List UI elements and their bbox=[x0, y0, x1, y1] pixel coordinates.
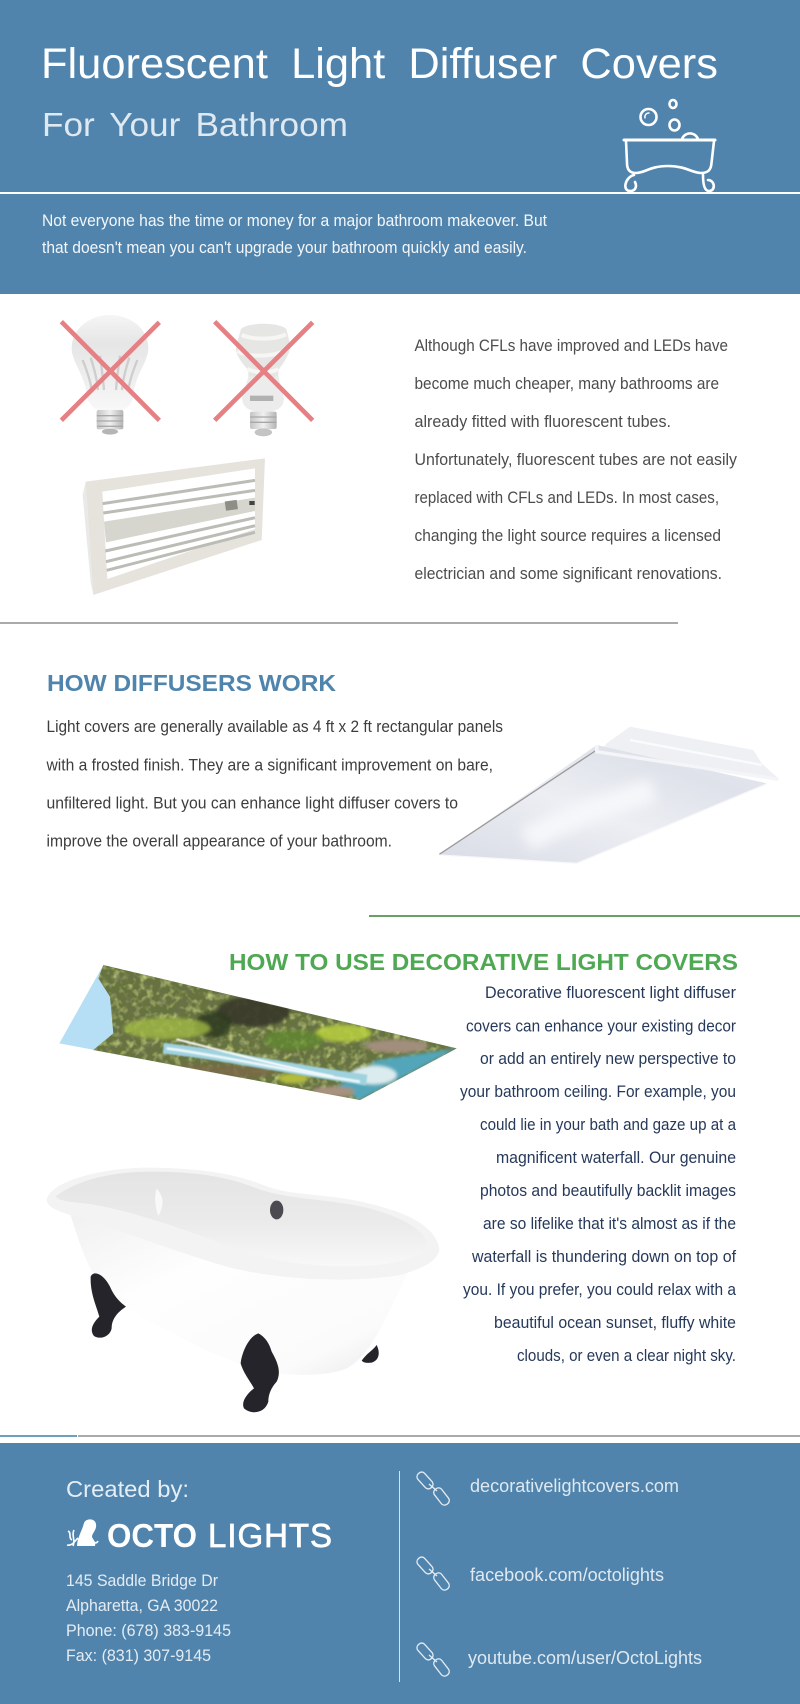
decorative covers paragraph: photos and beautifully backlit images bbox=[480, 1182, 736, 1200]
how diffusers work paragraph bbox=[46, 718, 503, 850]
back feet bbox=[91, 1273, 126, 1338]
section 1 paragraph: changing the light source requires a licensed bbox=[414, 527, 721, 545]
intro text: that doesn't mean you can't upgrade your bathroom quickly and easily. bbox=[42, 239, 527, 257]
icon: octopus logo bbox=[67, 1519, 98, 1546]
how diffusers work paragraph: with a frosted finish. They are a significant improvement on bare, bbox=[46, 756, 493, 774]
icon: link 1 bbox=[415, 1470, 451, 1507]
icon: link 2 bbox=[415, 1555, 451, 1592]
section 1 paragraph: already fitted with fluorescent tubes. bbox=[414, 413, 671, 431]
intro text bbox=[42, 212, 547, 257]
decorative covers paragraph: waterfall is thundering down on top of bbox=[471, 1248, 736, 1266]
image: crossed-out CFL bulb bbox=[215, 322, 313, 436]
footer panel bbox=[0, 1443, 800, 1704]
address block: Phone: (678) 383-9145 bbox=[66, 1622, 231, 1640]
decorative covers paragraph: Decorative fluorescent light diffuser bbox=[485, 984, 736, 1002]
image: fluorescent tube fixture bbox=[83, 458, 265, 595]
title: Fluorescent Light Diffuser Covers bbox=[41, 40, 718, 88]
heading: how to use decorative light covers: HOW TO USE DECORATIVE LIGHT COVERS bbox=[229, 949, 738, 975]
decorative covers paragraph: covers can enhance your existing decor bbox=[466, 1018, 736, 1036]
how diffusers work paragraph: unfiltered light. But you can enhance light diffuser covers to bbox=[46, 794, 458, 812]
tub body bbox=[71, 1215, 407, 1375]
created by label: Created by: bbox=[66, 1476, 189, 1502]
image: waterfall light cover bbox=[57, 963, 460, 1103]
how diffusers work paragraph: improve the overall appearance of your bathroom. bbox=[46, 832, 392, 850]
decorative covers paragraph: clouds, or even a clear night sky. bbox=[517, 1347, 736, 1365]
address block: Alpharetta, GA 30022 bbox=[66, 1597, 218, 1615]
link text 1: decorativelightcovers.com bbox=[470, 1476, 679, 1496]
section 1 paragraph: become much cheaper, many bathrooms are bbox=[414, 375, 719, 393]
section 1 paragraph: Unfortunately, fluorescent tubes are not easily bbox=[414, 451, 738, 469]
subtitle: For Your Bathroom bbox=[42, 106, 348, 143]
front foot bbox=[241, 1333, 279, 1412]
section 1 paragraph bbox=[414, 337, 738, 583]
heading: how diffusers work: HOW DIFFUSERS WORK bbox=[47, 670, 336, 696]
decorative covers paragraph: magnificent waterfall. Our genuine bbox=[496, 1149, 736, 1167]
section 1 paragraph: Although CFLs have improved and LEDs have bbox=[414, 337, 728, 355]
decorative covers paragraph: or add an entirely new perspective to bbox=[480, 1050, 736, 1068]
red cross bbox=[215, 322, 313, 420]
decorative covers paragraph bbox=[460, 984, 737, 1365]
octo lights wordmark: LIGHTS bbox=[208, 1517, 332, 1554]
address block bbox=[66, 1572, 231, 1665]
how diffusers work paragraph: Light covers are generally available as 4 ft x 2 ft rectangular panels bbox=[46, 718, 503, 736]
red cross bbox=[61, 322, 159, 420]
intro text: Not everyone has the time or money for a major bathroom makeover. But bbox=[42, 212, 547, 230]
drain bbox=[270, 1201, 283, 1219]
link text 3: youtube.com/user/OctoLights bbox=[468, 1648, 702, 1668]
address block: Fax: (831) 307-9145 bbox=[66, 1647, 211, 1665]
decorative covers paragraph: your bathroom ceiling. For example, you bbox=[460, 1083, 736, 1101]
decorative covers paragraph: beautiful ocean sunset, fluffy white bbox=[494, 1314, 736, 1332]
decorative covers paragraph: are so lifelike that it's almost as if the bbox=[483, 1215, 736, 1233]
image: frosted diffuser panel bbox=[439, 727, 778, 863]
icon: bathtub with bubbles bbox=[624, 100, 715, 191]
header banner bbox=[0, 0, 800, 294]
link text 2: facebook.com/octolights bbox=[470, 1565, 664, 1585]
icon: link 3 bbox=[415, 1641, 451, 1678]
section 1 paragraph: replaced with CFLs and LEDs. In most cases, bbox=[414, 489, 719, 507]
section 1 paragraph: electrician and some significant renovations. bbox=[414, 565, 722, 583]
octo lights wordmark bbox=[107, 1517, 332, 1554]
image: crossed-out LED bulb bbox=[61, 315, 159, 435]
octo lights wordmark: OCTO bbox=[107, 1517, 197, 1554]
rim bbox=[47, 1168, 439, 1280]
decorative covers paragraph: you. If you prefer, you could relax with a bbox=[463, 1281, 737, 1299]
image: clawfoot bathtub bbox=[47, 1168, 439, 1412]
decorative covers paragraph: could lie in your bath and gaze up at a bbox=[480, 1116, 737, 1134]
address block: 145 Saddle Bridge Dr bbox=[66, 1572, 218, 1590]
